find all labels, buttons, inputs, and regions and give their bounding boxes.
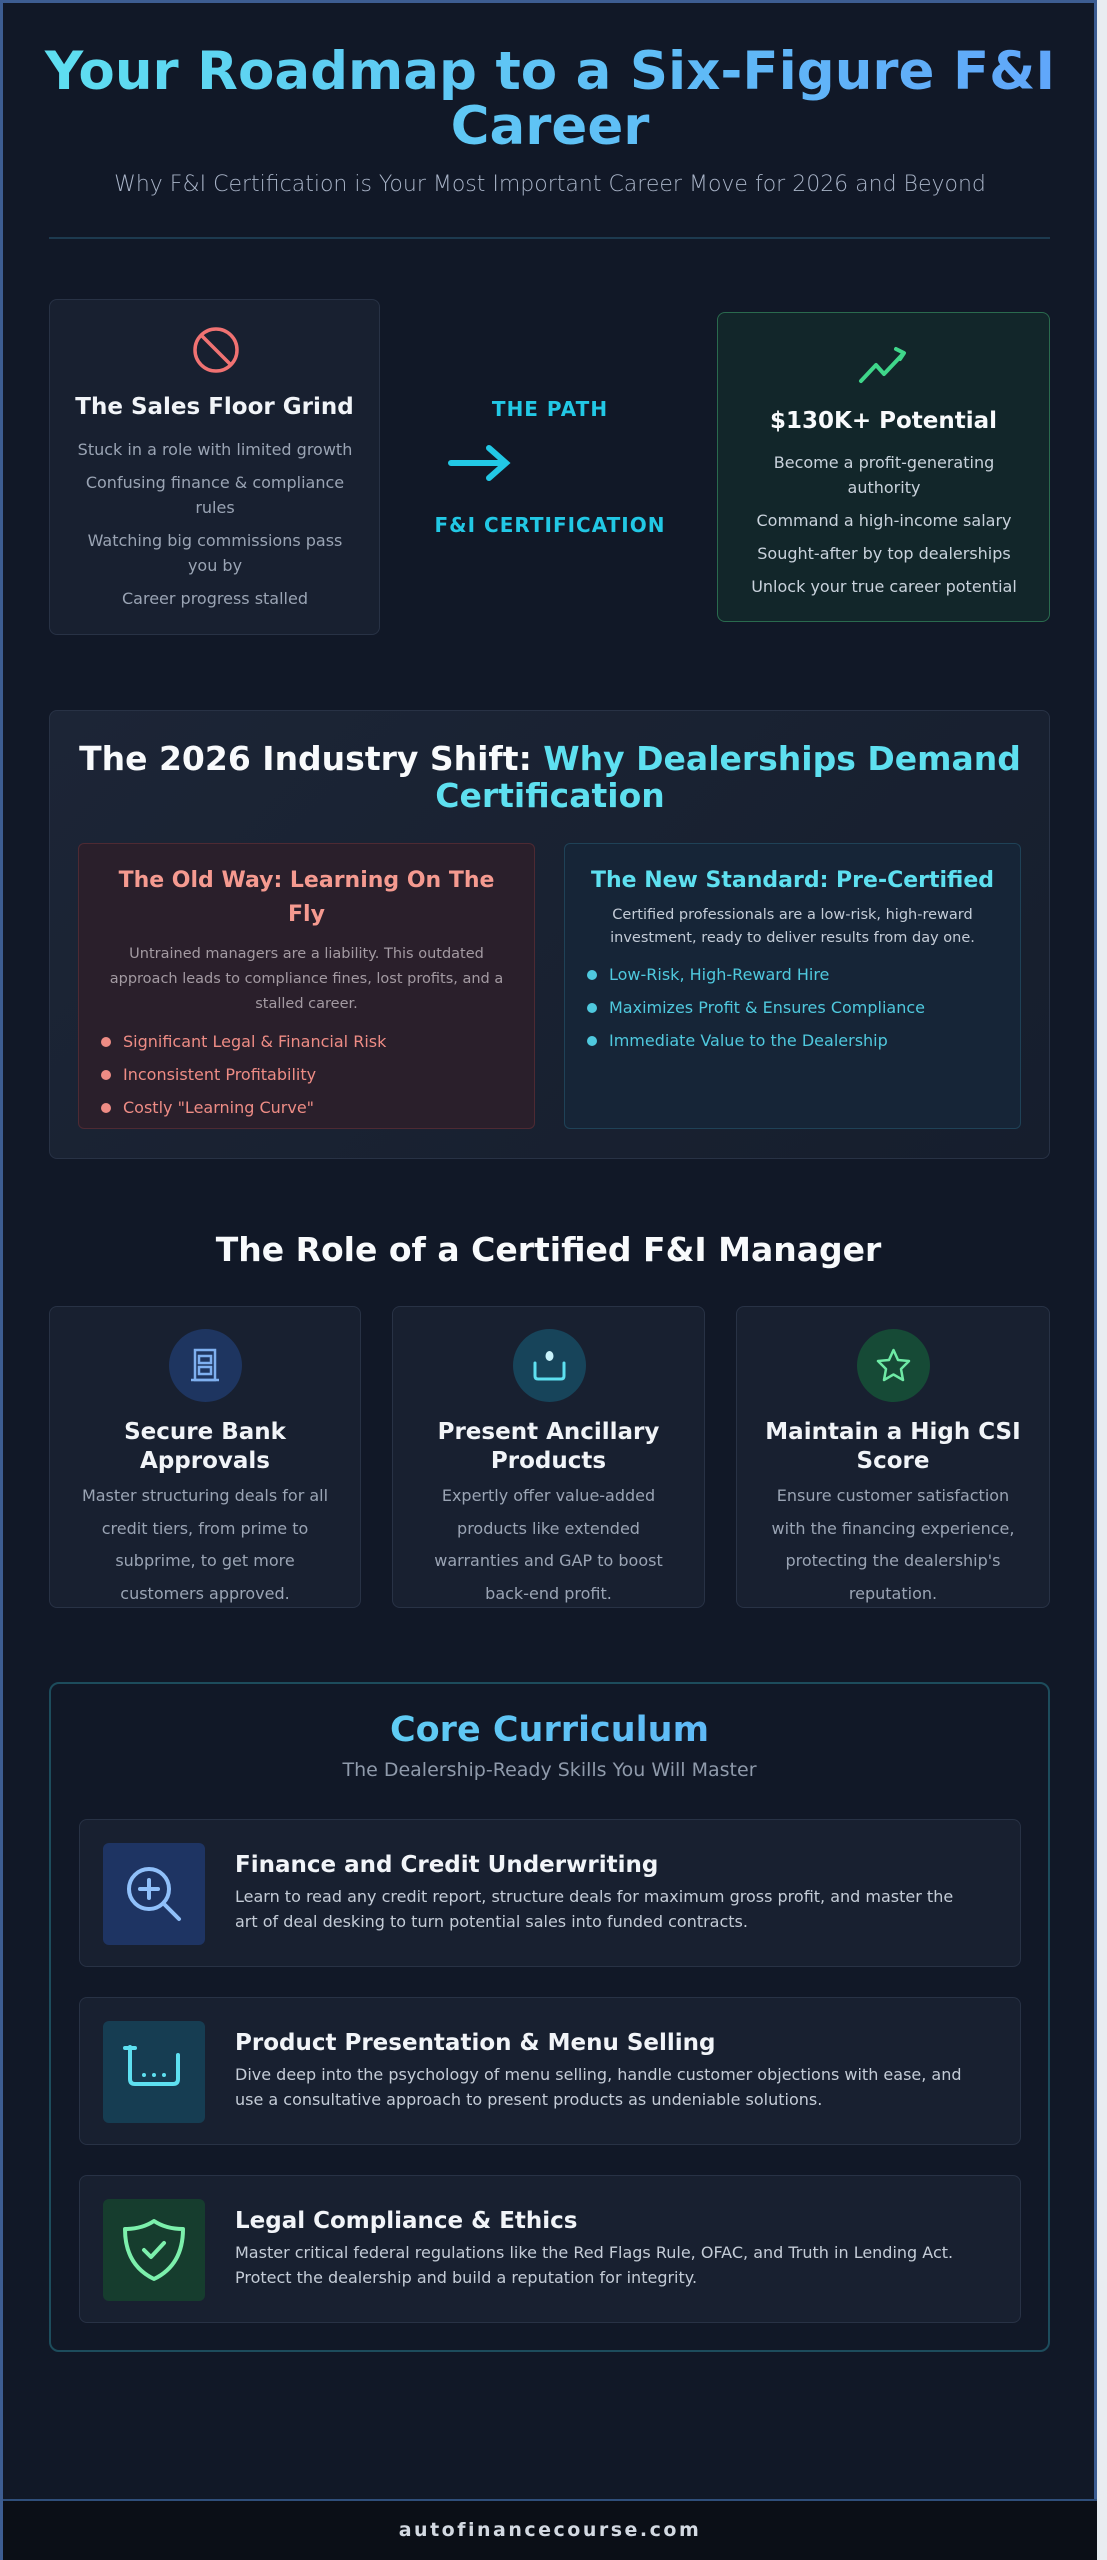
list bbox=[78, 440, 352, 608]
item: menu selling: Product Presentation & Menu Selling bbox=[235, 2030, 715, 2056]
heading bbox=[51, 1710, 1048, 1750]
icon: trend bbox=[858, 346, 906, 384]
subtitle: The Dealership-Ready Skills You Will Master bbox=[342, 1759, 757, 1781]
footer: autofinancecourse.com bbox=[399, 2519, 701, 2541]
the path bbox=[435, 397, 665, 537]
list: Confusing finance & compliance bbox=[86, 473, 344, 492]
card: ancillary products: Products bbox=[491, 1448, 606, 1474]
sub panel: new standard: Certified professionals are a low-risk, high-reward investment, ready to deliver results from day one. bbox=[610, 907, 975, 946]
card: ancillary products: Expertly offer value-added products like extended warranties and GAP to boost back-end profit. bbox=[434, 1486, 663, 1602]
title: Your Roadmap to a Six-Figure F&I Career bbox=[45, 41, 1055, 157]
panel: sales floor grind bbox=[49, 299, 380, 635]
item: menu selling: Dive deep into the psychology of menu selling, handle customer objections with ease, and use a consultative approach to present products as undeniable solutions. bbox=[235, 2065, 962, 2109]
list: rules bbox=[195, 498, 235, 517]
item: finance: Learn to read any credit report, structure deals for maximum gross profit, and master the art of deal desking to turn potential sales into funded contracts. bbox=[235, 1887, 953, 1931]
item: finance: Finance and Credit Underwriting bbox=[235, 1852, 658, 1878]
bullets bbox=[587, 965, 925, 1050]
card: bank approvals: Master structuring deals for all credit tiers, from prime to subprime, to get more customers approved. bbox=[82, 1486, 328, 1602]
item: compliance: Master critical federal regulations like the Red Flags Rule, OFAC, and Truth in Lending Act. Protect the dealership and build a reputation for integrity. bbox=[235, 2243, 953, 2287]
icon: tray bbox=[513, 1329, 586, 1402]
sub panel: new standard bbox=[564, 843, 1021, 1129]
heading: The Sales Floor Grind bbox=[75, 394, 354, 420]
card: CSI score bbox=[736, 1306, 1050, 1608]
card: bank approvals: Approvals bbox=[140, 1448, 270, 1474]
list: Sought-after by top dealerships bbox=[757, 544, 1011, 563]
icon: magnifier bbox=[103, 1843, 205, 1945]
card: bank approvals bbox=[49, 1306, 361, 1608]
sub panel: new standard: The New Standard: Pre-Certified bbox=[591, 868, 994, 893]
icon: tray bbox=[103, 2021, 205, 2123]
the path: F&I CERTIFICATION bbox=[435, 513, 665, 537]
icon: building bbox=[169, 1329, 242, 1402]
sub panel: old way: The Old Way: Learning On The Fly bbox=[119, 868, 494, 927]
subtitle: Why F&I Certification is Your Most Important Career Move for 2026 and Beyond bbox=[114, 172, 986, 197]
list: Command a high-income salary bbox=[756, 511, 1012, 530]
card: ancillary products: Present Ancillary bbox=[438, 1419, 659, 1445]
bullets bbox=[101, 1032, 386, 1117]
item: compliance: Legal Compliance & Ethics bbox=[235, 2208, 578, 2234]
bullets: Inconsistent Profitability bbox=[123, 1065, 316, 1084]
item: compliance bbox=[79, 2175, 1021, 2323]
list: Unlock your true career potential bbox=[751, 577, 1017, 596]
bullets: Significant Legal & Financial Risk bbox=[123, 1032, 386, 1051]
item: menu selling bbox=[79, 1997, 1021, 2145]
card: CSI score: Ensure customer satisfaction with the financing experience, protecting the dealership's reputation. bbox=[772, 1486, 1014, 1602]
panel: core curriculum bbox=[49, 1682, 1050, 2352]
sub panel: old way bbox=[78, 843, 535, 1129]
card: CSI score: Maintain a High CSI bbox=[765, 1419, 1021, 1445]
icon: star bbox=[857, 1329, 930, 1402]
heading: The 2026 Industry Shift: Why Dealerships Demand Certification bbox=[79, 739, 1021, 815]
card: ancillary products bbox=[392, 1306, 705, 1608]
bullets: Costly "Learning Curve" bbox=[123, 1098, 314, 1117]
icon: prohibited bbox=[193, 327, 239, 373]
list: Stuck in a role with limited growth bbox=[78, 440, 352, 459]
the path: THE PATH bbox=[492, 397, 608, 421]
heading: $130K+ Potential bbox=[770, 408, 997, 434]
arrow bbox=[448, 445, 510, 481]
heading: role: The Role of a Certified F&I Manager bbox=[216, 1230, 881, 1269]
card: bank approvals: Secure Bank bbox=[124, 1419, 286, 1445]
card: CSI score: Score bbox=[857, 1448, 929, 1474]
heading: Core Curriculum bbox=[390, 1710, 709, 1750]
bullets: Maximizes Profit & Ensures Compliance bbox=[609, 998, 925, 1017]
list: Career progress stalled bbox=[122, 589, 308, 608]
panel: potential bbox=[717, 312, 1050, 622]
panel: industry shift bbox=[49, 710, 1050, 1159]
item: finance bbox=[79, 1819, 1021, 1967]
list: Become a profit-generating authority bbox=[774, 453, 994, 497]
footer bbox=[3, 2499, 1097, 2560]
sub panel: old way: Untrained managers are a liability. This outdated approach leads to compliance fines, lost profits, and a stalled career. bbox=[110, 946, 503, 1012]
list bbox=[751, 453, 1017, 596]
bullets: Low-Risk, High-Reward Hire bbox=[609, 965, 829, 984]
bullets: Immediate Value to the Dealership bbox=[609, 1031, 888, 1050]
list: you by bbox=[188, 556, 242, 575]
list: Watching big commissions pass bbox=[88, 531, 342, 550]
icon: shield bbox=[103, 2199, 205, 2301]
